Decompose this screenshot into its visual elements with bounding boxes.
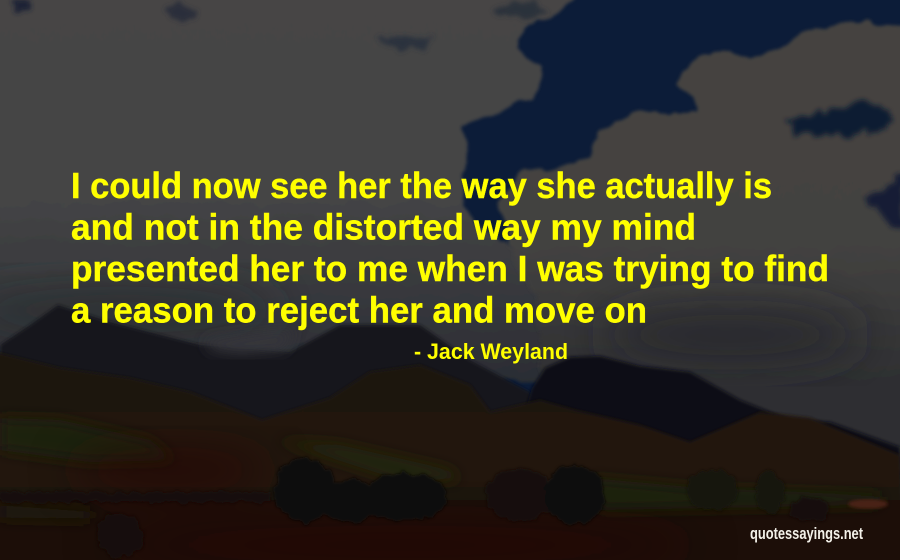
background: central and right brown hillsides: [0, 352, 900, 560]
quote line 2: and not in the distorted way my mind: [71, 206, 696, 248]
background: dark foreground strip: [0, 500, 900, 560]
background: red-brown slopes: [70, 456, 700, 557]
background: right cloud bank: [500, 22, 900, 470]
background: sky gaps in clouds: [10, 0, 900, 232]
background: dark storm shading: [0, 286, 860, 363]
background: red bush at right: [848, 499, 888, 509]
background: misty cloud on mountain: [205, 328, 295, 354]
background: right dark mountain: [500, 356, 900, 500]
watermark: quotessayings.net: quotessayings.net: [750, 524, 863, 543]
author attribution: - Jack Weyland: [414, 339, 568, 364]
quote line 1: I could now see her the way she actually is: [71, 165, 772, 206]
background: left dark mountain: [0, 305, 560, 470]
quote line 3: presented her to me when I was trying to find: [71, 248, 829, 289]
background: left cloud bank: [0, 0, 610, 380]
quote text: [71, 165, 829, 330]
quote line 4: a reason to reject her and move on: [71, 290, 647, 330]
background: tree line: [0, 458, 830, 557]
background: green fields: [0, 418, 880, 520]
